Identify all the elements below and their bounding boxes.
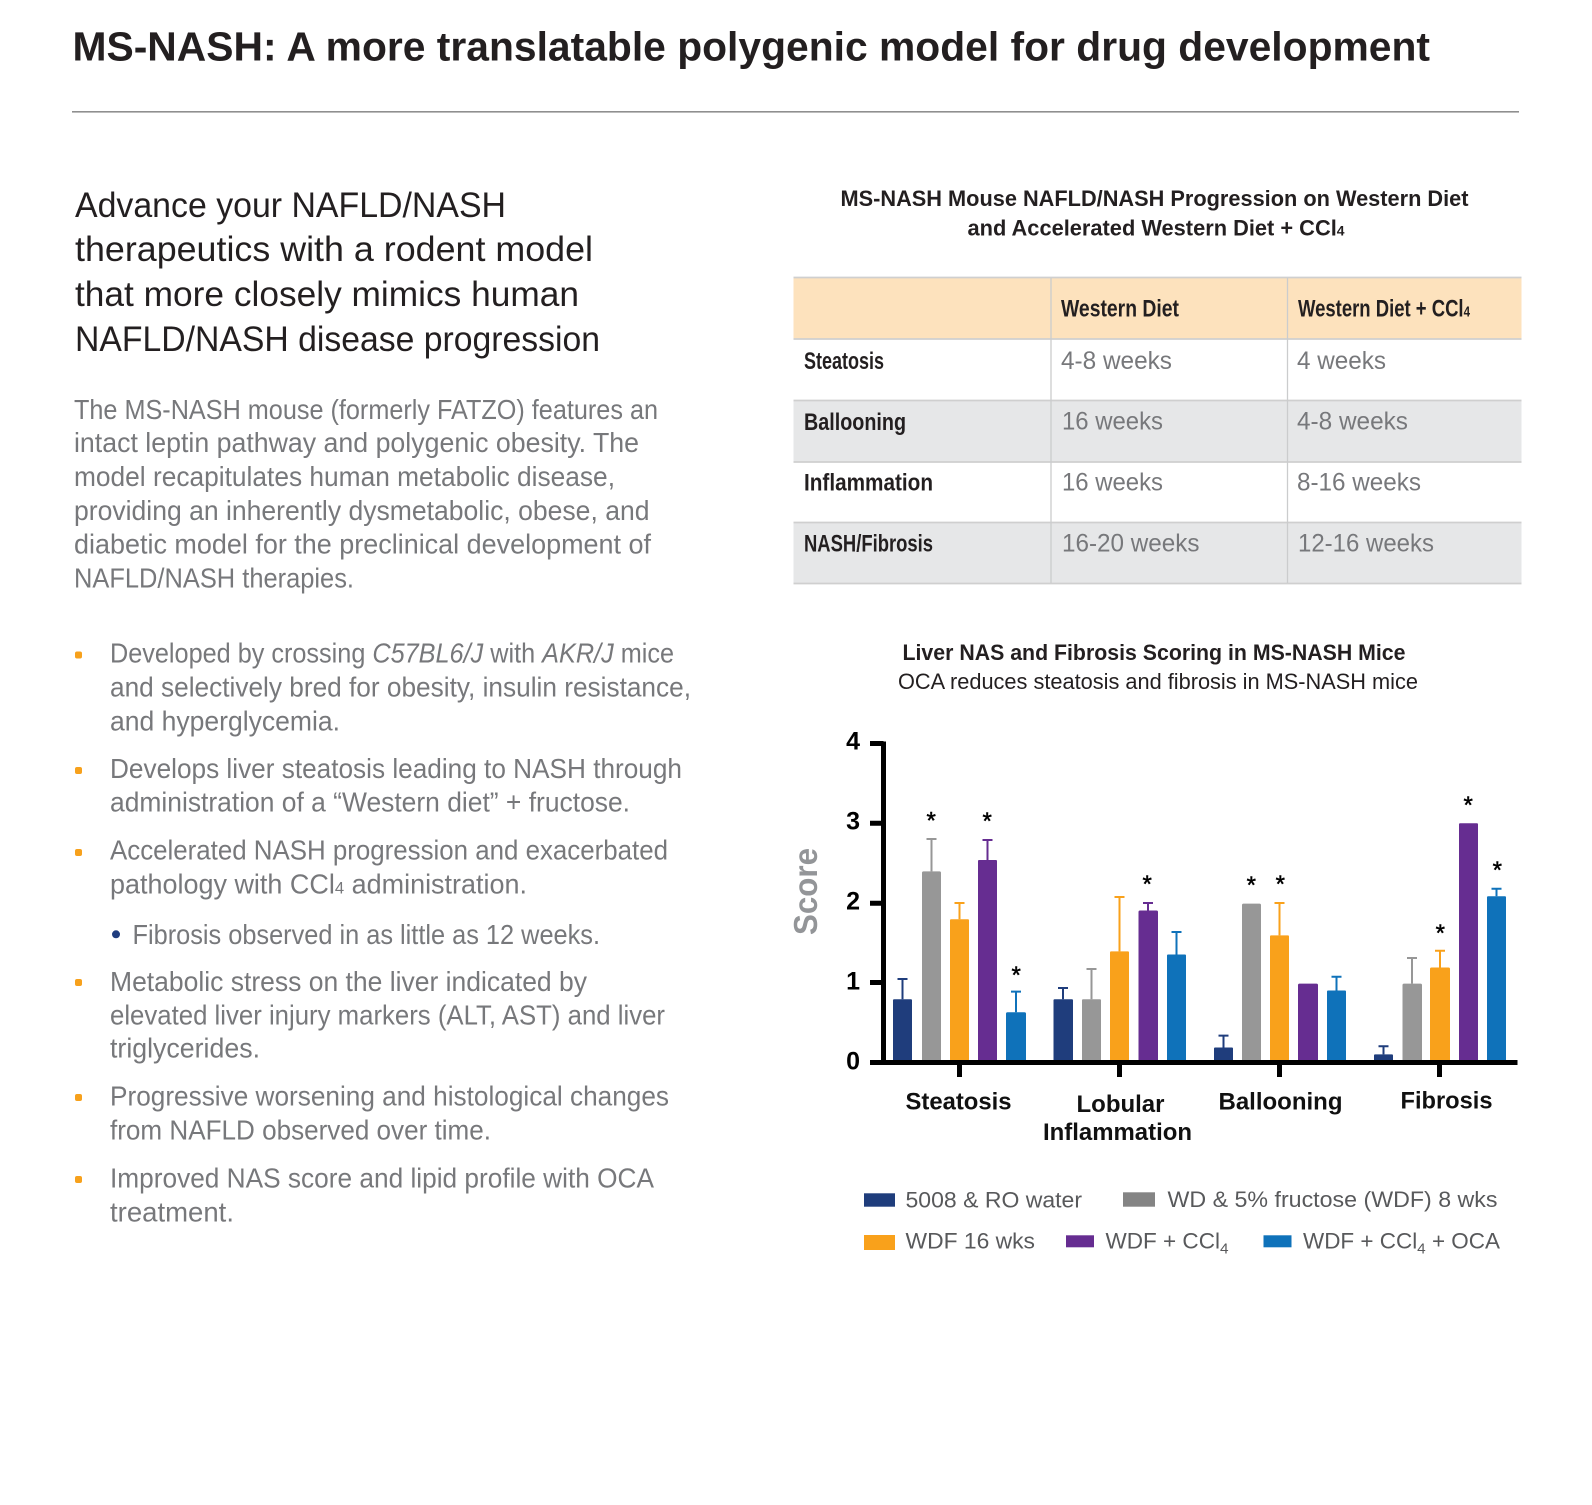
- bullet: OCA treatment: treatment.: [110, 1197, 234, 1228]
- row: steatosis: 4 weeks: [1297, 347, 1386, 375]
- significance stars: *: [1143, 871, 1152, 898]
- significance stars: *: [1276, 871, 1285, 898]
- y-axis labels: 1: [846, 968, 860, 996]
- legend: WDF 16 wks: WDF 16 wks: [906, 1228, 1035, 1254]
- header row: [794, 277, 1522, 338]
- intro paragraph: diabetic model for the preclinical development of: [74, 528, 651, 560]
- row: NASH/fibrosis: [804, 530, 1434, 558]
- title: MS-NASH: A more translatable polygenic model for drug development: [72, 24, 1430, 70]
- bullet: crossing: [75, 638, 691, 737]
- significance stars: *: [1464, 792, 1473, 819]
- bullet: histological changes: Progressive worsening and histological changes: [110, 1081, 669, 1112]
- bullet: metabolic stress: Metabolic stress on the liver indicated by: [110, 966, 587, 997]
- subheading: NAFLD/NASH disease progression: [75, 320, 600, 359]
- intro paragraph: providing an inherently dysmetabolic, obese, and: [74, 495, 650, 526]
- bullet: OCA treatment: Improved NAS score and lipid profile with OCA: [110, 1162, 655, 1193]
- row: inflammation: Inflammation: [804, 470, 933, 496]
- bullet: crossing: and selectively bred for obesity, insulin resistance,: [110, 672, 691, 703]
- bullet: metabolic stress: [75, 966, 665, 1064]
- category labels: Steatosis: [906, 1088, 1012, 1116]
- significance stars: *: [1247, 872, 1256, 899]
- row: steatosis: Steatosis: [804, 348, 884, 375]
- subheading: [75, 186, 600, 359]
- chart heading: Liver NAS and Fibrosis Scoring in MS-NASH Mice: [902, 640, 1406, 665]
- bullet: OCA treatment: [75, 1162, 655, 1228]
- axes: [870, 742, 1518, 1077]
- legend: WDF + CCl4 + OCA: 4: [1417, 1240, 1426, 1258]
- category labels: Inflammation: [1043, 1119, 1192, 1146]
- row: NASH/fibrosis: NASH/Fibrosis: [804, 530, 933, 558]
- sub-bullet: fibrosis: Fibrosis observed in as little as 12 weeks.: [132, 919, 600, 950]
- subheading: Advance your NAFLD/NASH: [75, 186, 506, 225]
- bullet: metabolic stress: triglycerides.: [110, 1033, 260, 1064]
- row: ballooning: Ballooning: [804, 409, 906, 436]
- group: lobular inflammation: [1054, 897, 1186, 1062]
- table heading: and Accelerated Western Diet + CCl4: [968, 216, 1345, 240]
- group: ballooning: [1214, 903, 1346, 1062]
- category labels: Ballooning: [1218, 1088, 1342, 1116]
- intro paragraph: NAFLD/NASH therapies.: [74, 562, 354, 594]
- legend: WDF + CCl4: 4: [1220, 1240, 1228, 1258]
- group: fibrosis: [1374, 823, 1506, 1062]
- bullet: steatosis: administration of a “Western diet” + fructose.: [110, 787, 630, 818]
- significance stars: *: [1493, 857, 1502, 884]
- row: steatosis: 4-8 weeks: [1061, 347, 1172, 375]
- legend: 5008 & RO water: 5008 & RO water: [906, 1188, 1082, 1212]
- header row: Western Diet + CCl4: [1298, 296, 1471, 322]
- bullet: accelerated progression: [75, 834, 668, 899]
- category labels: Lobular: [1076, 1091, 1164, 1118]
- subheading: therapeutics with a rodent model: [75, 230, 593, 269]
- legend: WDF + CCl4 + OCA: + OCA: [1426, 1228, 1500, 1254]
- legend: WDF + CCl4 + OCA: [1264, 1228, 1500, 1258]
- bullet: steatosis: [75, 753, 682, 818]
- bullet list: [75, 638, 691, 1228]
- bullet: histological changes: [75, 1081, 669, 1145]
- bullet: accelerated progression: Accelerated NASH progression and exacerbated: [110, 834, 668, 865]
- legend: WD & 5% fructose: WD & 5% fructose (WDF) 8 wks: [1168, 1187, 1498, 1212]
- y-axis labels: [846, 728, 860, 1076]
- row: inflammation: 8-16 weeks: [1297, 468, 1421, 496]
- row: NASH/fibrosis: 12-16 weeks: [1298, 530, 1434, 558]
- bullet: crossing: and hyperglycemia.: [110, 706, 340, 737]
- bullet: histological changes: from NAFLD observed over time.: [110, 1114, 491, 1145]
- y-axis labels: 2: [846, 888, 860, 916]
- row: NASH/fibrosis: 16-20 weeks: [1062, 530, 1200, 558]
- category labels: Fibrosis: [1400, 1088, 1492, 1115]
- row: ballooning: 16 weeks: [1062, 408, 1163, 436]
- legend: WDF + CCl4: WDF + CCl: [1106, 1228, 1217, 1254]
- y-axis labels: 0: [846, 1048, 860, 1076]
- bullet: accelerated progression: pathology with CCl4 administration.: [110, 868, 527, 899]
- bullet: crossing: Developed by crossing C57BL6/J with AKR/J mice: [110, 638, 674, 669]
- table heading: MS-NASH Mouse NAFLD/NASH Progression on Western Diet: [840, 186, 1469, 211]
- intro paragraph: model recapitulates human metabolic disease,: [74, 461, 615, 492]
- chart heading: [898, 640, 1418, 694]
- chart heading: OCA reduces steatosis and fibrosis in MS-NASH mice: [898, 669, 1418, 694]
- y-axis labels: 3: [846, 808, 860, 836]
- header row: Western Diet: [1061, 296, 1179, 322]
- bar chart: [787, 728, 1518, 1146]
- progression table: [794, 277, 1522, 584]
- significance stars: *: [983, 808, 992, 835]
- significance stars: *: [1012, 962, 1021, 989]
- y-axis title: Score: [787, 848, 824, 935]
- y-axis labels: 4: [846, 728, 860, 756]
- row: inflammation: 16 weeks: [1062, 468, 1163, 496]
- row: steatosis: [804, 347, 1386, 375]
- row: inflammation: [804, 468, 1421, 496]
- table heading: [840, 186, 1469, 240]
- bullet: metabolic stress: elevated liver injury markers (ALT, AST) and liver: [110, 1000, 665, 1031]
- intro paragraph: intact leptin pathway and polygenic obesity. The: [74, 427, 639, 458]
- intro paragraph: [74, 394, 658, 594]
- significance stars: *: [927, 808, 936, 834]
- bullet: steatosis: Develops liver steatosis leading to NASH through: [110, 753, 682, 784]
- significance stars: [927, 792, 1502, 989]
- group: steatosis: [893, 839, 1026, 1061]
- legend: WDF + CCl4: [1066, 1228, 1228, 1258]
- significance stars: *: [1436, 920, 1445, 947]
- category labels: [906, 1088, 1492, 1146]
- row: ballooning: 4-8 weeks: [1297, 408, 1408, 436]
- legend: [864, 1187, 1500, 1258]
- intro paragraph: The MS-NASH mouse (formerly FATZO) features an: [74, 394, 658, 425]
- row: ballooning: [804, 408, 1408, 436]
- legend: WDF + CCl4 + OCA: WDF + CCl: [1303, 1228, 1415, 1254]
- subheading: that more closely mimics human: [75, 275, 579, 314]
